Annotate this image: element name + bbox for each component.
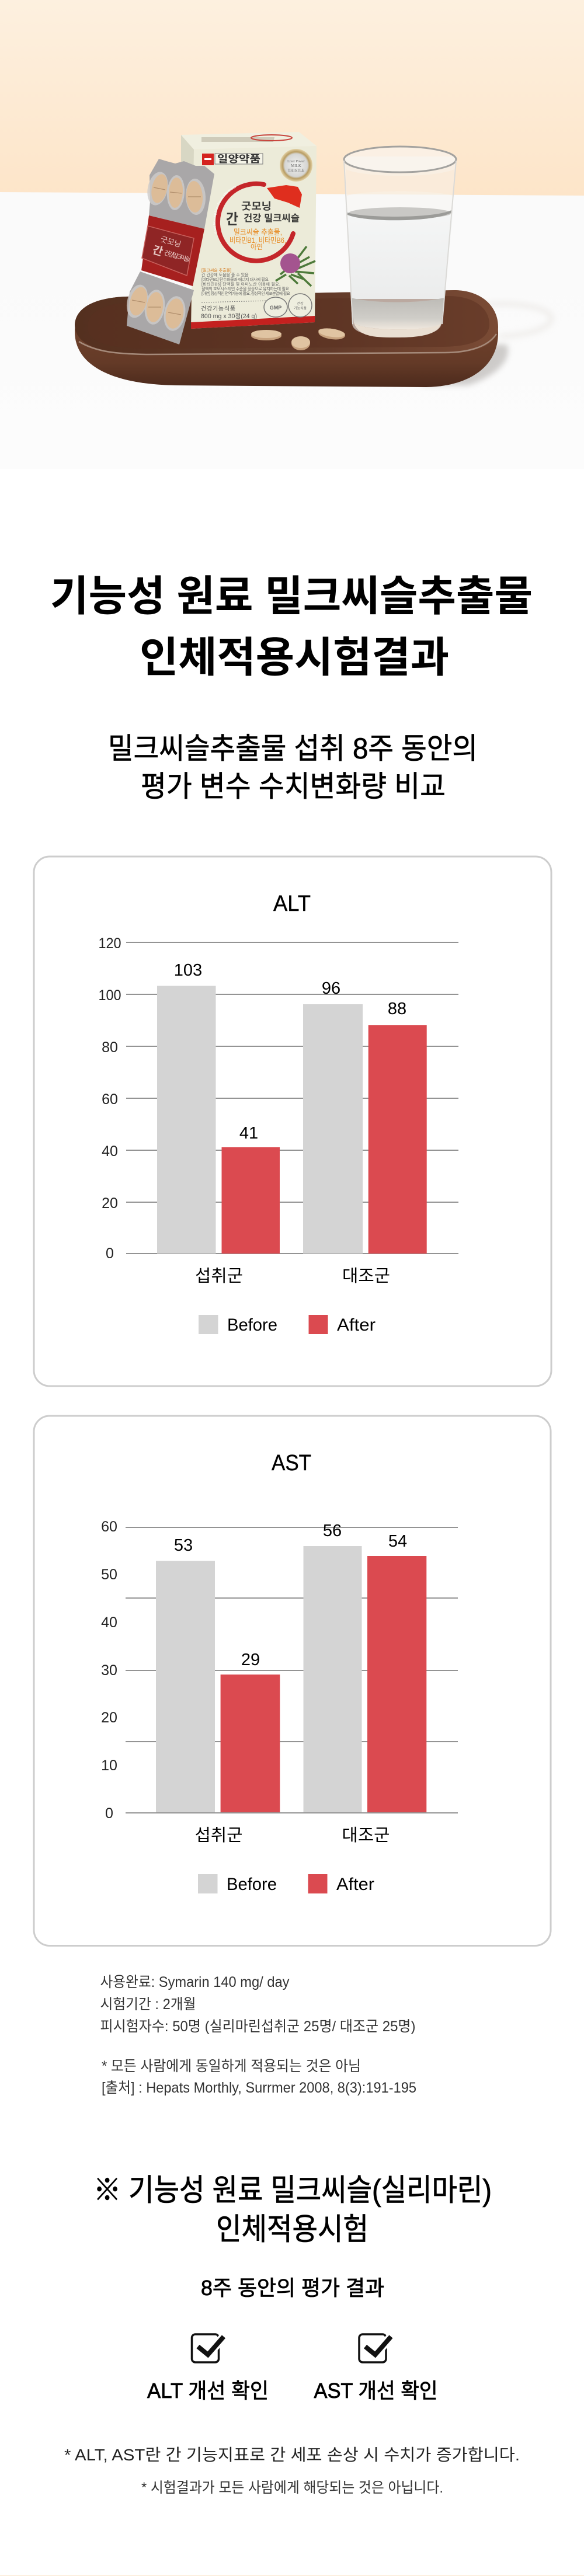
- icon: checkbox ALT: [192, 2334, 224, 2362]
- product box: 건강 밀크씨슬: [244, 213, 300, 224]
- product box: 건강기능식품: [201, 305, 235, 312]
- value labels: 88: [388, 1000, 406, 1018]
- subheading: 8 week results: 8주 동안의 평가 결과: [201, 2276, 384, 2300]
- value labels: 103: [174, 961, 202, 980]
- title: 기능성 원료 밀크씨슬추출물: [50, 573, 533, 620]
- label: ALT improvement: ALT 개선 확인: [147, 2379, 269, 2403]
- product box: 혈액의 호모시스테인 수준을 정상으로 유지하는데 필요: [201, 286, 290, 291]
- legend: After: [336, 1875, 374, 1894]
- y axis labels: 40: [102, 1143, 118, 1160]
- y axis labels: 20: [101, 1710, 117, 1726]
- chart title: ALT: ALT: [273, 892, 311, 916]
- chart title: AST: AST: [272, 1451, 311, 1475]
- product box: 간: [226, 211, 238, 228]
- product box: [아연] 정상적인 면역기능에 필요, 정상적인 세포분열에 필요: [201, 291, 291, 296]
- blister pack: [123, 159, 214, 344]
- y axis labels: 10: [101, 1757, 117, 1774]
- product box: 간 건강에 도움을 줄 수 있음: [201, 272, 249, 277]
- product box: 일양약품: [217, 154, 260, 165]
- product box: [비타민B6] 단백질 및 아미노산 이용에 필요,: [201, 281, 280, 287]
- value labels: 54: [388, 1532, 407, 1551]
- y axis labels: 80: [102, 1039, 118, 1056]
- product box: [비타민B1] 탄수화물과 에너지 대사에 필요: [201, 277, 269, 282]
- title: 인체적용시험결과: [140, 635, 449, 681]
- wooden tray: [75, 290, 498, 387]
- study notes: 시험기간 : 2개월: [100, 1996, 196, 2013]
- product box: Good Morning Liver Power Milk thistle: [213, 186, 236, 234]
- heading: clinical trial: ※ 기능성 원료 밀크씨슬(실리마린): [93, 2174, 492, 2208]
- product box: 800 mg x 30정(24 g): [201, 312, 257, 320]
- value labels: 56: [323, 1522, 342, 1540]
- product box: 밀크씨슬 추출물,: [234, 228, 282, 236]
- bars: [156, 1546, 426, 1812]
- panel: AST chart: [34, 1416, 551, 1945]
- panel: ALT chart: [34, 857, 551, 1386]
- study notes: [출처] : Hepats Morthly, Surrmer 2008, 8(3):191-195: [102, 2080, 416, 2096]
- product box: GMP: [270, 305, 281, 311]
- product box: 비타민B1, 비타민B6,: [230, 236, 286, 245]
- y axis labels: 60: [101, 1519, 117, 1535]
- subtitle: 평가 변수 수치변화량 비교: [141, 770, 446, 803]
- legend: Before: [227, 1875, 277, 1894]
- value labels: 96: [322, 979, 340, 998]
- footnote: ALT AST explanation: * ALT, AST란 간 기능지표로 간 세포 손상 시 수치가 증가합니다.: [64, 2446, 520, 2464]
- blister pack: 굿모닝: [159, 235, 182, 249]
- y axis labels: [101, 1519, 117, 1822]
- subtitle: [108, 732, 478, 803]
- product box: 아연: [251, 243, 263, 251]
- study notes: * 모든 사람에게 동일하게 적용되는 것은 아님: [102, 2058, 361, 2074]
- tray shadow: [420, 304, 551, 385]
- title: [50, 573, 533, 681]
- legend: [198, 1874, 374, 1894]
- product box: 기능식품: [294, 306, 307, 311]
- category labels: 대조군: [342, 1826, 390, 1845]
- bars: [157, 986, 427, 1254]
- product box: Liver Power: [287, 160, 305, 163]
- product box: MILK: [291, 163, 301, 168]
- product box: 굿모닝: [241, 201, 272, 212]
- category labels: [195, 1266, 390, 1286]
- footnote: results disclaimer: * 시험결과가 모든 사람에게 해당되는 것은 아닙니다.: [141, 2480, 443, 2496]
- heading: clinical trial: 인체적용시험: [216, 2213, 369, 2247]
- legend: Before: [227, 1315, 277, 1335]
- label: AST improvement: AST 개선 확인: [314, 2379, 438, 2403]
- product box: [181, 132, 317, 329]
- value labels: [174, 1522, 407, 1669]
- heading: clinical trial: [93, 2174, 492, 2247]
- y axis labels: 50: [101, 1567, 117, 1583]
- glass of water: [343, 147, 457, 337]
- y axis labels: 20: [102, 1195, 118, 1212]
- y axis labels: 60: [102, 1091, 118, 1108]
- legend: [199, 1315, 376, 1335]
- y axis labels: 30: [101, 1662, 117, 1679]
- product box: 건강: [297, 301, 304, 306]
- loose tablets: [251, 327, 346, 350]
- y axis labels: 0: [105, 1805, 113, 1822]
- blister bubbles: [123, 170, 207, 333]
- category labels: 섭취군: [195, 1826, 243, 1845]
- y axis labels: [98, 935, 121, 1262]
- value labels: 53: [174, 1536, 193, 1555]
- blister pack: 간: [151, 243, 164, 259]
- legend: After: [337, 1315, 376, 1335]
- product box: THISTLE: [288, 168, 304, 173]
- study notes: [100, 1974, 416, 2096]
- subtitle: 밀크씨슬추출물 섭취 8주 동안의: [108, 732, 478, 765]
- y axis labels: 120: [98, 935, 121, 952]
- value labels: 41: [239, 1124, 258, 1143]
- category labels: 섭취군: [195, 1267, 243, 1286]
- value labels: [174, 961, 406, 1143]
- product box: [밀크씨슬 추출물]: [201, 267, 231, 273]
- blister pack: 건강 밀크씨슬: [163, 249, 191, 264]
- study notes: 사용완료: Symarin 140 mg/ day: [100, 1974, 290, 1990]
- value labels: 29: [241, 1651, 260, 1669]
- thistle plant: [276, 246, 315, 286]
- y axis labels: 40: [101, 1614, 117, 1631]
- hero photo: product on wooden tray: [0, 0, 584, 389]
- y axis labels: 0: [106, 1245, 114, 1262]
- y axis labels: 100: [98, 987, 121, 1004]
- category labels: [195, 1826, 390, 1845]
- category labels: 대조군: [342, 1266, 390, 1286]
- icon: checkbox AST: [359, 2334, 391, 2362]
- study notes: 피시험자수: 50명 (실리마린섭취군 25명/ 대조군 25명): [100, 2018, 416, 2035]
